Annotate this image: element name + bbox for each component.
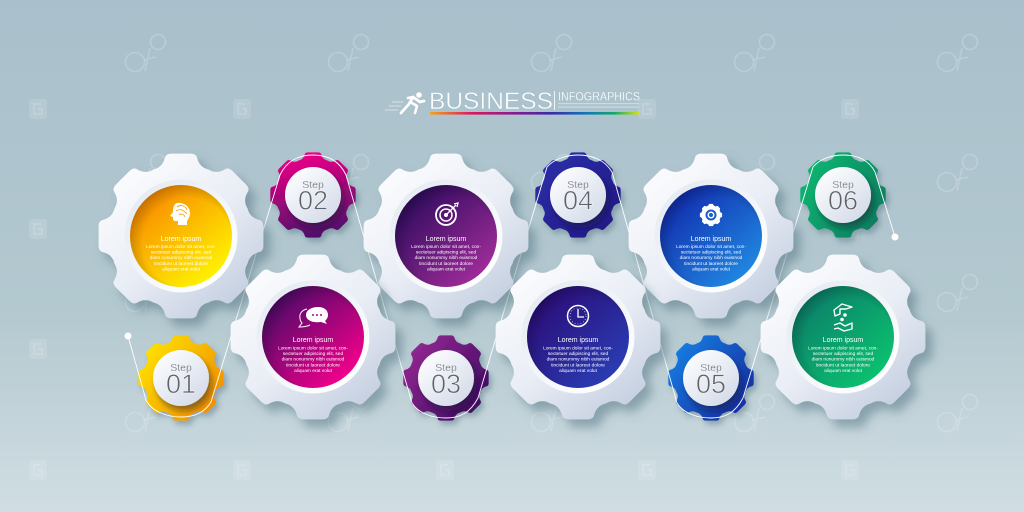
- step badge 06: 06: [828, 186, 858, 216]
- step badge 03: 03: [431, 369, 461, 399]
- text: lorem ipsum: sectetuer adipiscing elit, sed: [681, 250, 741, 256]
- text: lorem ipsum: sectetuer adipiscing elit, sed: [416, 250, 476, 256]
- text: lorem ipsum: aliquam erat volut: [294, 368, 333, 374]
- step badge 04: [550, 167, 606, 223]
- step gear 05: [668, 335, 754, 421]
- icon: head with brain: [170, 203, 190, 225]
- step badge 05: Step: [700, 362, 722, 374]
- text: lorem ipsum: [543, 337, 613, 374]
- text: lorem ipsum: diam nonummy nibh euismod: [547, 357, 610, 363]
- panel: gear 2 magenta: [231, 255, 395, 419]
- divider and subheading: INFOGRAPHICS: INFOGRAPHICS: [558, 90, 640, 104]
- text: lorem ipsum: Lorem ipsum dolor sit amet, con-: [676, 244, 746, 250]
- step badge 01: Step: [170, 362, 192, 374]
- text: lorem ipsum: [146, 236, 216, 272]
- panel: gear 5 blue: [629, 154, 793, 318]
- step badge 03: [418, 350, 474, 406]
- text: lorem ipsum: Lorem ipsum: [426, 236, 466, 243]
- text: lorem ipsum: Lorem ipsum: [691, 236, 731, 243]
- icon: cog: [700, 204, 722, 226]
- text: lorem ipsum: Lorem ipsum: [161, 236, 201, 243]
- step badge 01: 01: [166, 369, 196, 399]
- text: lorem ipsum: tincidunt ut laoreet dolore: [551, 362, 605, 368]
- text: lorem ipsum: aliquam erat volut: [559, 368, 598, 374]
- text: lorem ipsum: Lorem ipsum dolor sit amet, con-: [543, 346, 613, 352]
- connecting line: [124, 155, 898, 418]
- text: lorem ipsum: sectetuer adipiscing elit, sed: [548, 351, 608, 357]
- text: lorem ipsum: tincidunt ut laoreet dolore: [286, 362, 340, 368]
- icon: clock: [568, 306, 588, 326]
- text: lorem ipsum: Lorem ipsum dolor sit amet, con-: [146, 244, 216, 250]
- text: lorem ipsum: Lorem ipsum dolor sit amet, con-: [411, 244, 481, 250]
- step badge 02: Step: [302, 179, 324, 191]
- panel: gear 3 purple: [364, 154, 528, 318]
- text: lorem ipsum: Lorem ipsum: [293, 337, 333, 344]
- text: lorem ipsum: diam nonummy nibh euismod: [812, 357, 875, 363]
- step badge 02: 02: [298, 186, 328, 216]
- text: lorem ipsum: aliquam erat volut: [162, 266, 201, 272]
- text: lorem ipsum: Lorem ipsum: [823, 337, 863, 344]
- step badge 01: [153, 350, 209, 406]
- step gear 06: [800, 152, 886, 238]
- heading: BUSINESS: BUSINESS: [429, 88, 553, 115]
- icon: speech bubbles: [299, 307, 328, 327]
- step badge 06: [815, 167, 871, 223]
- step badge 02: [285, 167, 341, 223]
- text: lorem ipsum: tincidunt ut laoreet dolore: [419, 261, 473, 267]
- text: lorem ipsum: sectetuer adipiscing elit, sed: [813, 351, 873, 357]
- text: lorem ipsum: diam nonummy nibh euismod: [680, 255, 743, 261]
- text: lorem ipsum: tincidunt ut laoreet dolore: [154, 261, 208, 267]
- text: lorem ipsum: aliquam erat volut: [692, 266, 731, 272]
- title block: [385, 88, 640, 115]
- icon: hands with coins: [834, 304, 852, 331]
- text: lorem ipsum: [278, 337, 348, 374]
- text: lorem ipsum: sectetuer adipiscing elit, sed: [283, 351, 343, 357]
- text: lorem ipsum: [676, 236, 746, 272]
- step badge 06: Step: [832, 179, 854, 191]
- step gear 02: [270, 152, 356, 238]
- text: lorem ipsum: tincidunt ut laoreet dolore: [684, 261, 738, 267]
- text: lorem ipsum: aliquam erat volut: [824, 368, 863, 374]
- step gear 01: [138, 335, 224, 421]
- text: lorem ipsum: sectetuer adipiscing elit, sed: [151, 250, 211, 256]
- panel: gear 1 orange: [99, 154, 263, 318]
- step gear 03: [403, 335, 489, 421]
- text: lorem ipsum: Lorem ipsum dolor sit amet, con-: [278, 346, 348, 352]
- step badge 05: [683, 350, 739, 406]
- step badge 04: 04: [563, 186, 593, 216]
- icon: target: [436, 203, 458, 225]
- panel: gear 6 green: [761, 255, 925, 419]
- text: lorem ipsum: [411, 236, 481, 272]
- rainbow bar: [430, 112, 639, 115]
- panel: gear 4 indigo: [496, 255, 660, 419]
- icon: running man: [385, 92, 424, 113]
- text: lorem ipsum: [808, 337, 878, 374]
- text: lorem ipsum: Lorem ipsum: [558, 337, 598, 344]
- text: lorem ipsum: diam nonummy nibh euismod: [415, 255, 478, 261]
- text: lorem ipsum: tincidunt ut laoreet dolore: [816, 362, 870, 368]
- divider and subheading: INFOGRAPHICS: [554, 90, 640, 110]
- step badge 04: Step: [567, 179, 589, 191]
- text: lorem ipsum: aliquam erat volut: [427, 266, 466, 272]
- step gear 04: [535, 152, 621, 238]
- text: lorem ipsum: diam nonummy nibh euismod: [150, 255, 213, 261]
- step badge 05: 05: [696, 369, 726, 399]
- text: lorem ipsum: Lorem ipsum dolor sit amet, con-: [808, 346, 878, 352]
- step badge 03: Step: [435, 362, 457, 374]
- text: lorem ipsum: diam nonummy nibh euismod: [282, 357, 345, 363]
